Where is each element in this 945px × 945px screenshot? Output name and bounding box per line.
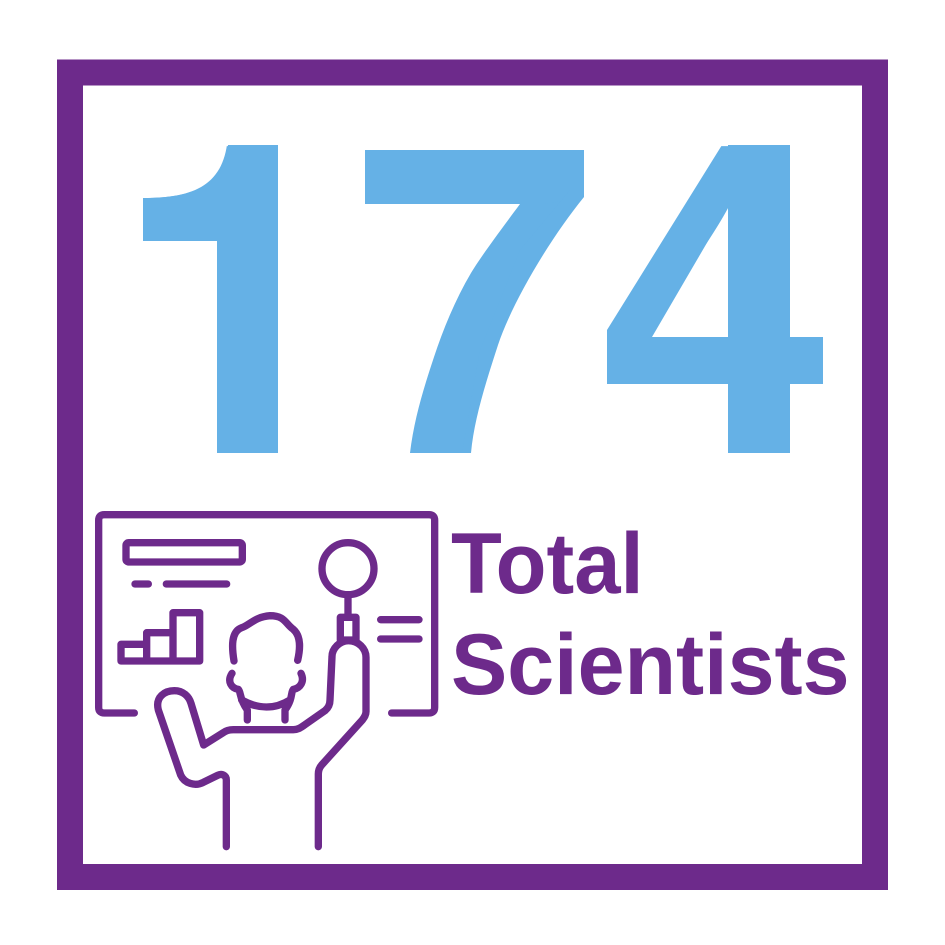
bar chart [121, 613, 200, 661]
big number: 174: 4 [583, 49, 834, 548]
icon: scientist presenting at board [99, 515, 435, 847]
label: Total Scientists [451, 515, 849, 713]
big number: 174: 1 [122, 49, 355, 548]
title bar [126, 543, 242, 562]
arms and body [158, 641, 366, 847]
panel: purple square frame [70, 72, 875, 877]
label: Total Scientists: Total [451, 515, 644, 611]
neck and ears [230, 673, 302, 720]
side lines [381, 620, 419, 639]
board outline [99, 515, 435, 713]
text dashes [135, 573, 227, 595]
big number: 174: 7 [343, 49, 591, 548]
head [233, 616, 300, 661]
big number: 174 [120, 49, 847, 548]
magnifying glass [340, 595, 356, 640]
magnifying glass lens [322, 543, 374, 595]
label: Total Scientists: Scientists [451, 617, 849, 713]
